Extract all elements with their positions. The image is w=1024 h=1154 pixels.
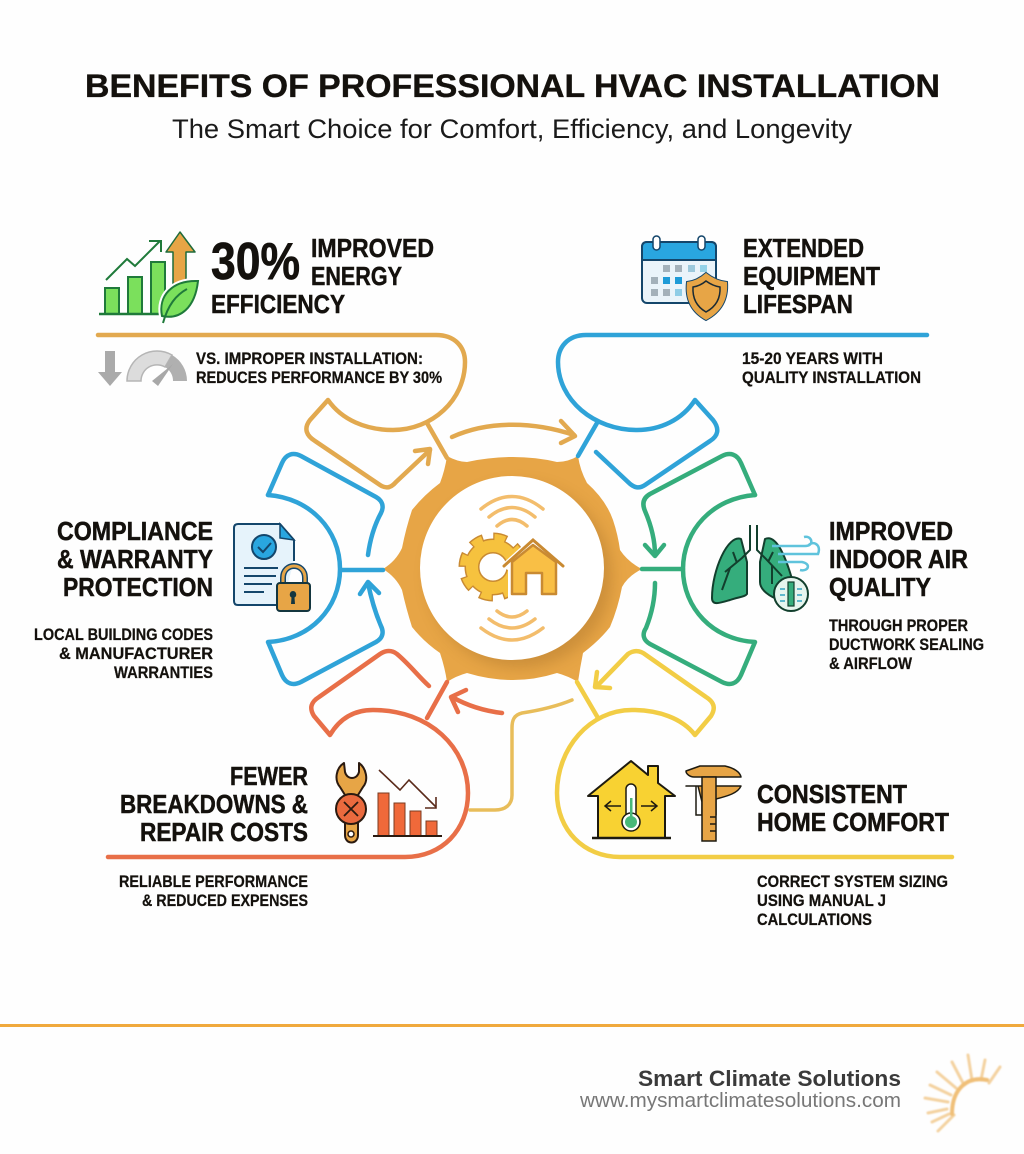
heading: QUALITY <box>829 572 931 602</box>
description: DUCTWORK SEALING <box>829 635 984 654</box>
panel: home comfort <box>557 651 952 929</box>
icon: house with thermometer <box>588 761 675 838</box>
heading: IMPROVED <box>311 233 434 263</box>
heading: & WARRANTY <box>57 544 213 574</box>
heading <box>211 233 434 319</box>
heading <box>829 516 968 602</box>
heading: INDOOR AIR <box>829 544 968 574</box>
flow outline: green <box>642 454 755 684</box>
heading: PROTECTION <box>63 572 213 602</box>
icon: wrench <box>336 763 366 842</box>
description <box>757 872 948 929</box>
signal waves <box>481 496 543 640</box>
heading: COMPLIANCE <box>57 516 213 546</box>
central hub <box>383 456 642 682</box>
description: & REDUCED EXPENSES <box>142 891 308 910</box>
icon: caliper <box>686 766 741 841</box>
description <box>742 349 921 387</box>
panel: energy efficiency <box>98 232 575 487</box>
description: VS. IMPROPER INSTALLATION: <box>196 349 423 368</box>
description <box>196 349 442 387</box>
heading: HOME COMFORT <box>757 807 949 837</box>
description <box>119 872 308 910</box>
panel: indoor air quality <box>642 454 984 684</box>
icon: gear and house <box>464 536 568 598</box>
description: THROUGH PROPER <box>829 616 968 635</box>
flow outline: blue <box>558 335 927 487</box>
heading <box>120 761 308 847</box>
description <box>829 616 984 673</box>
heading: ENERGY <box>311 261 402 291</box>
heading <box>57 516 213 602</box>
icon: lungs with wind <box>712 525 819 611</box>
flow outline: orange <box>98 335 575 487</box>
heading: BREAKDOWNS & <box>120 789 308 819</box>
heading: EQUIPMENT <box>743 261 880 291</box>
description: LOCAL BUILDING CODES <box>34 625 213 644</box>
icon: sun logo <box>925 1055 1000 1131</box>
flow outline: left blue <box>268 454 383 684</box>
icon: down arrow and gauge <box>98 351 187 386</box>
description: RELIABLE PERFORMANCE <box>119 872 308 891</box>
panel: breakdowns <box>108 651 502 910</box>
heading: EXTENDED <box>743 233 864 263</box>
description: & AIRFLOW <box>829 654 913 673</box>
description: CORRECT SYSTEM SIZING <box>757 872 948 891</box>
30 percent stat: 30% <box>211 233 300 291</box>
description <box>34 625 213 682</box>
description: USING MANUAL J <box>757 891 886 910</box>
title: BENEFITS OF PROFESSIONAL HVAC INSTALLATION <box>85 68 940 104</box>
heading: REPAIR COSTS <box>140 817 308 847</box>
heading: LIFESPAN <box>743 289 853 319</box>
panel: compliance and warranty <box>34 454 383 684</box>
footer brand <box>579 1066 901 1112</box>
heading <box>757 779 949 837</box>
description: REDUCES PERFORMANCE BY 30% <box>196 368 442 387</box>
connector: yellow to orange line <box>470 700 572 810</box>
icon: growth chart and leaf <box>99 232 198 323</box>
footer brand: Smart Climate Solutions <box>638 1066 901 1091</box>
icon: calendar with shield <box>642 236 727 320</box>
description: QUALITY INSTALLATION <box>742 368 921 387</box>
description: 15-20 YEARS WITH <box>742 349 883 368</box>
panel: equipment lifespan <box>558 233 927 487</box>
hub shadow <box>428 484 612 668</box>
hub inner circle <box>420 476 604 660</box>
icon: falling bar chart <box>373 770 442 836</box>
description: & MANUFACTURER <box>59 644 213 663</box>
flow outline: yellow <box>557 651 952 857</box>
flow outline: red <box>108 651 502 857</box>
heading: FEWER <box>230 761 308 791</box>
description: WARRANTIES <box>114 663 213 682</box>
heading: EFFICIENCY <box>211 289 345 319</box>
icon: document with lock <box>234 524 310 611</box>
heading: CONSISTENT <box>757 779 907 809</box>
description: CALCULATIONS <box>757 910 872 929</box>
footer brand: www.mysmartclimatesolutions.com <box>579 1090 901 1112</box>
hub ring <box>383 456 642 682</box>
heading <box>743 233 880 319</box>
footer rule <box>0 1024 1024 1027</box>
subtitle: The Smart Choice for Comfort, Efficiency, and Longevity <box>172 114 853 144</box>
heading: IMPROVED <box>829 516 953 546</box>
